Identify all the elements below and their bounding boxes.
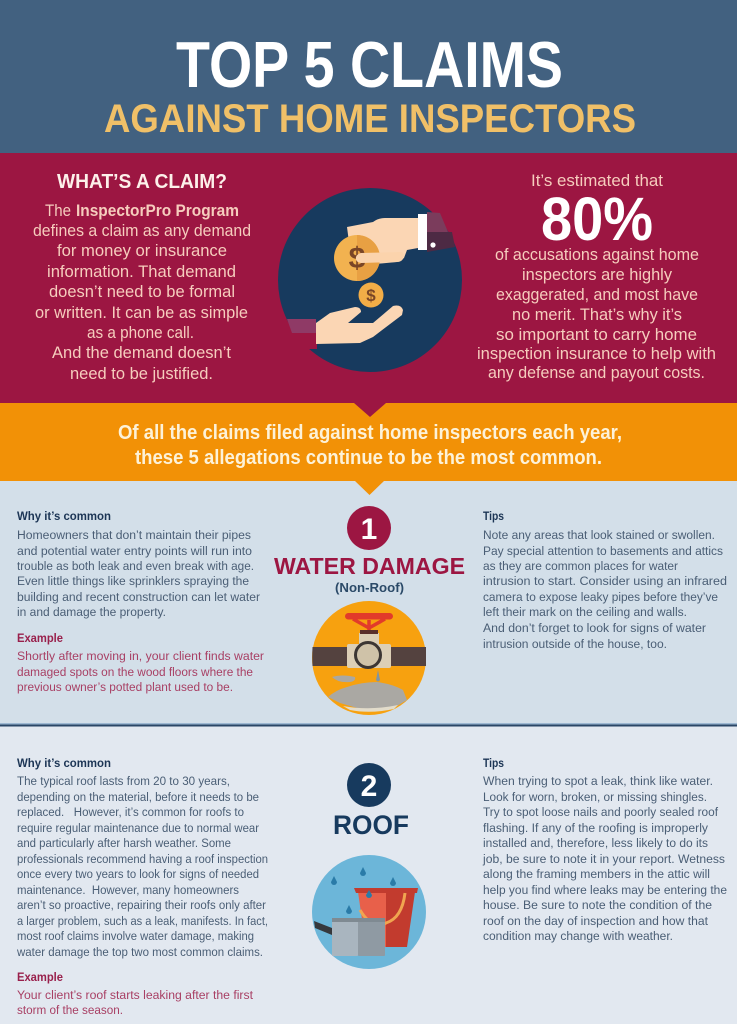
text block: claim definition: doesn’t need to be formal bbox=[49, 283, 235, 301]
lower hand bbox=[316, 306, 403, 344]
tips: flashing. If any of the roofing is improperly bbox=[483, 821, 709, 835]
example bbox=[17, 631, 264, 694]
example bbox=[17, 970, 254, 1017]
text block: 80% statistic: inspectors are highly bbox=[522, 266, 673, 284]
tips: along the framing members in the attic will bbox=[483, 867, 710, 881]
panel: claim 1 water damage bbox=[0, 481, 737, 724]
water drops bbox=[331, 867, 396, 914]
why it's common: replaced. However, it’s common for roofs to bbox=[17, 805, 244, 819]
subtitle: AGAINST HOME INSPECTORS bbox=[104, 97, 636, 141]
number badge 2: 2 bbox=[361, 770, 377, 803]
why it's common: Why it’s common bbox=[17, 756, 111, 770]
title: TOP 5 CLAIMS bbox=[176, 28, 563, 101]
example: Shortly after moving in, your client finds water bbox=[17, 649, 264, 663]
why it's common: once every two years to look for signs of needed bbox=[17, 867, 259, 881]
icon: bucket and pot catching drips bbox=[312, 855, 426, 969]
text block: 80% statistic: It’s estimated that bbox=[531, 172, 664, 190]
heading: roof: ROOF bbox=[333, 810, 409, 840]
big coin bbox=[334, 235, 380, 281]
tips: Tips bbox=[483, 756, 504, 770]
tips: Note any areas that look stained or swollen. bbox=[483, 528, 715, 542]
icon: hands exchanging coins: $ bbox=[349, 242, 366, 275]
tips: left their mark on the ceiling and walls. bbox=[483, 605, 687, 619]
why it's common: and potential water entry points will run into bbox=[17, 544, 252, 558]
why it's common: depending on the material, before it needs to be bbox=[17, 790, 259, 804]
tips: Pay special attention to basements and attics bbox=[483, 544, 723, 558]
small coin bbox=[358, 282, 384, 308]
tips: as they are common places for water bbox=[483, 559, 678, 573]
text block: claim definition: The bbox=[45, 202, 71, 220]
text block: claim definition bbox=[33, 202, 251, 383]
heading: water damage: WATER DAMAGE bbox=[274, 553, 465, 579]
text block: 80% statistic: exaggerated, and most have bbox=[496, 286, 698, 304]
tips bbox=[482, 756, 727, 943]
text block: claim definition: for money or insurance bbox=[57, 242, 227, 260]
tips: condition may change with weather. bbox=[483, 929, 673, 943]
panel: claim 2 roof bbox=[0, 726, 737, 1024]
tips: And don’t forget to look for signs of water bbox=[483, 621, 706, 635]
text block: claim definition: And the demand doesn’t bbox=[52, 344, 232, 362]
number badge 1: 1 bbox=[361, 513, 377, 546]
text block: 80% statistic: inspection insurance to help with bbox=[477, 345, 716, 363]
number badge 1 bbox=[347, 506, 391, 550]
why it's common: aren’t so proactive, repairing their roofs only after bbox=[17, 898, 266, 912]
why it's common: Even little things like sprinklers spraying the bbox=[17, 574, 249, 588]
subheading: non-roof: (Non-Roof) bbox=[335, 580, 404, 595]
tips: job, be sure to note it in your report. Wetness bbox=[482, 852, 725, 866]
why it's common: trouble as both leak and even break with age. bbox=[17, 559, 254, 573]
text block: claim definition: defines a claim as any demand bbox=[33, 222, 251, 240]
bucket bbox=[354, 888, 418, 947]
upper cuff bbox=[418, 214, 427, 250]
why it's common: Homeowners that don’t maintain their pipes bbox=[17, 528, 251, 542]
panel: what's a claim bbox=[0, 153, 737, 403]
why it's common: in and damage the property. bbox=[17, 605, 166, 619]
banner text bbox=[118, 422, 622, 469]
why it's common: most roof claims involve water damage, making bbox=[17, 929, 254, 943]
tips: installed and, therefore, less likely to do its bbox=[483, 836, 708, 850]
why it's common: a larger problem, such as a leak, manifests. In fact, bbox=[17, 914, 268, 928]
pot bbox=[314, 918, 385, 956]
example: storm of the season. bbox=[17, 1003, 123, 1017]
tips: Look for worn, broken, or missing shingles. bbox=[483, 790, 707, 804]
banner text: Of all the claims filed against home inspectors each year, bbox=[118, 422, 622, 444]
why it's common: building and recent construction can let water bbox=[17, 590, 260, 604]
why it's common: Why it’s common bbox=[17, 509, 111, 523]
why it's common bbox=[17, 509, 260, 619]
text block: 80% statistic: any defense and payout costs. bbox=[488, 364, 705, 382]
stat: 80%: 80% bbox=[541, 185, 653, 253]
upper hand thumb bbox=[356, 252, 404, 263]
why it's common: and particularly after harsh weather. Some bbox=[17, 836, 231, 850]
icon: hands exchanging coins bbox=[278, 188, 462, 372]
lower sleeve bbox=[287, 319, 316, 333]
why it's common: The typical roof lasts from 20 to 30 years, bbox=[17, 774, 230, 788]
tips: camera to expose leaky pipes before they’ve bbox=[483, 590, 718, 604]
heading: what's a claim: WHAT’S A CLAIM? bbox=[57, 171, 227, 193]
banner text: these 5 allegations continue to be the most common. bbox=[135, 447, 602, 469]
text block: claim definition: or written. It can be as simple bbox=[35, 304, 248, 322]
icon: leaking pipe valve bbox=[312, 601, 426, 715]
example: previous owner’s potted plant used to be. bbox=[17, 680, 233, 694]
example: damaged spots on the wood floors where the bbox=[17, 665, 253, 679]
panel: header bbox=[0, 0, 737, 153]
why it's common: maintenance. However, many homeowners bbox=[17, 883, 239, 897]
text block: claim definition: need to be justified. bbox=[70, 365, 213, 383]
why it's common: professionals recommend having a roof inspection bbox=[17, 852, 268, 866]
text block: 80% statistic: so important to carry home bbox=[496, 326, 697, 344]
why it's common: water damage the top two most common claims. bbox=[16, 945, 263, 959]
tips: intrusion outside of the house, too. bbox=[483, 637, 667, 651]
upper hand palm bbox=[347, 218, 418, 264]
tips: Try to spot loose nails and poorly sealed roof bbox=[483, 805, 719, 819]
text block: claim definition: information. That demand bbox=[47, 263, 236, 281]
example: Example bbox=[17, 970, 63, 984]
tips: roof on the day of inspection and how that bbox=[483, 914, 709, 928]
tips bbox=[483, 509, 727, 651]
why it's common bbox=[16, 756, 268, 959]
text block: 80% statistic: of accusations against home bbox=[495, 246, 699, 264]
upper sleeve bbox=[427, 212, 448, 232]
tips: help you find where leaks may be entering the bbox=[483, 883, 727, 897]
why it's common: require regular maintenance due to normal wear bbox=[17, 821, 259, 835]
tips: When trying to spot a leak, think like water. bbox=[483, 774, 713, 788]
panel: orange banner bbox=[0, 403, 737, 481]
number badge 2 bbox=[347, 763, 391, 807]
text block: claim definition: InspectorPro Program bbox=[76, 202, 239, 220]
text block: 80% statistic: no merit. That’s why it’s bbox=[512, 306, 682, 324]
text block: 80% statistic bbox=[477, 172, 716, 382]
text block: claim definition: as a phone call. bbox=[87, 324, 194, 342]
icon: hands exchanging coins: $ bbox=[366, 286, 376, 305]
example: Example bbox=[17, 631, 63, 645]
example: Your client’s roof starts leaking after the first bbox=[17, 988, 254, 1002]
tips: Tips bbox=[483, 509, 504, 523]
tips: intrusion to start. Consider using an infrared bbox=[483, 574, 727, 588]
tips: house. Be sure to note the condition of the bbox=[483, 898, 712, 912]
